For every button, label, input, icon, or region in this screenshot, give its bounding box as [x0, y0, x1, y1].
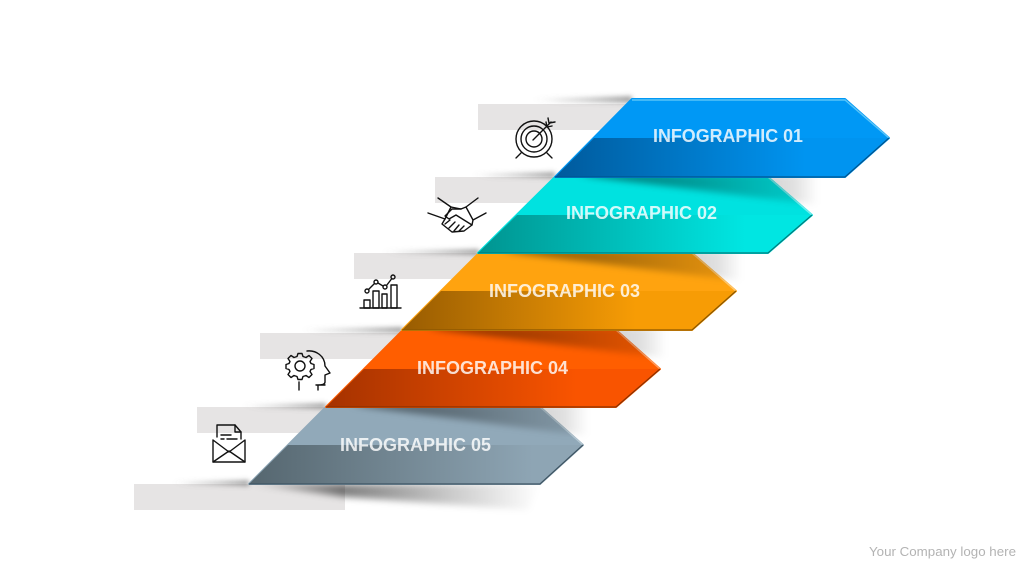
arrow 3 [402, 253, 736, 330]
icon: growth chart [360, 275, 401, 308]
icon: envelope with document [213, 425, 245, 462]
arrow 2 [478, 177, 812, 253]
label 02: INFOGRAPHIC 02 [566, 203, 717, 223]
arrow 4 [326, 330, 660, 407]
label 01: INFOGRAPHIC 01 [653, 126, 803, 146]
label 05: INFOGRAPHIC 05 [340, 435, 491, 455]
shadow of arrow 2 [500, 250, 742, 281]
icon: handshake [428, 198, 486, 232]
arrow 5 [249, 407, 583, 484]
shadow of arrow 1 [577, 174, 818, 205]
arrow 1 [555, 99, 889, 177]
shadow under arrow 5 [250, 484, 540, 510]
shadow of arrow 4 [350, 404, 588, 436]
grey bars [134, 104, 632, 510]
icon: head with gear [286, 351, 330, 390]
footer: company logo text: Your Company logo here [869, 544, 1016, 559]
shadow of arrow 3 [425, 327, 666, 358]
label 04: INFOGRAPHIC 04 [417, 358, 568, 378]
label 03: INFOGRAPHIC 03 [489, 281, 640, 301]
top shadows behind arrows [170, 96, 632, 486]
icon: target [516, 118, 555, 158]
